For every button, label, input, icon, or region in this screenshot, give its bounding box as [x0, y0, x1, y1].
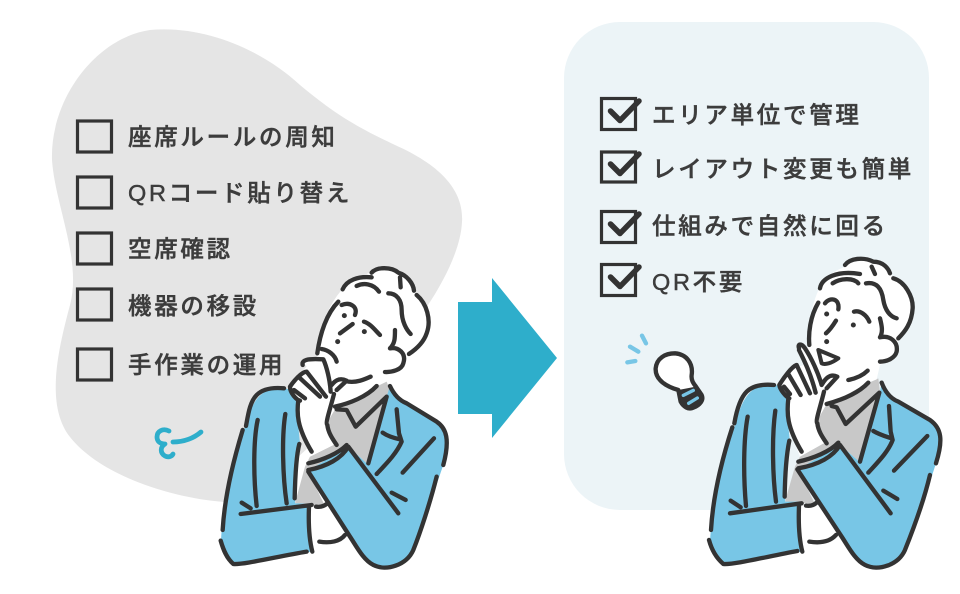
checklist: after items	[602, 98, 914, 296]
item: 手作業の運用: 手作業の運用	[128, 352, 285, 378]
white under arm	[800, 503, 837, 544]
panel: after pale blue rounded panel	[564, 22, 929, 510]
item: 空席確認: 空席確認	[128, 236, 233, 262]
icon: sigh puff	[157, 430, 201, 457]
item: 座席ルールの周知	[78, 121, 338, 152]
item: QRコード貼り替え: QRコード貼り替え	[128, 180, 352, 206]
item: 仕組みで自然に回る: 仕組みで自然に回る	[652, 213, 888, 239]
item: エリア単位で管理	[602, 98, 862, 130]
item: QRコード貼り替え	[78, 177, 352, 208]
head and hand	[779, 259, 913, 457]
item: QR不要: QR不要	[652, 269, 745, 295]
face dots	[338, 316, 364, 342]
arrow: right pointing	[458, 278, 557, 438]
checklist: before items	[78, 121, 352, 380]
item: 空席確認	[78, 233, 233, 264]
panel: before grey blob	[52, 29, 462, 502]
item: 仕組みで自然に回る	[602, 212, 888, 242]
jacket	[710, 383, 940, 568]
mouth	[818, 350, 838, 364]
white under arm	[310, 503, 347, 544]
outlines	[221, 268, 447, 568]
item: 機器の移設	[78, 289, 259, 320]
item: 手作業の運用	[78, 349, 285, 380]
item: QR不要	[602, 264, 745, 296]
shirt	[785, 378, 880, 504]
face dots	[827, 314, 853, 342]
shirt	[295, 382, 390, 506]
outlines	[709, 259, 940, 568]
figure: man with idea	[709, 259, 940, 568]
head and hand	[289, 267, 429, 457]
item: 座席ルールの周知: 座席ルールの周知	[128, 124, 338, 150]
icon: light bulb with sparks	[627, 336, 702, 408]
item: レイアウト変更も簡単: レイアウト変更も簡単	[652, 156, 914, 182]
item: 機器の移設: 機器の移設	[128, 293, 259, 319]
jacket	[221, 386, 447, 568]
figure: man worried	[221, 267, 447, 568]
item: エリア単位で管理: エリア単位で管理	[652, 102, 862, 128]
